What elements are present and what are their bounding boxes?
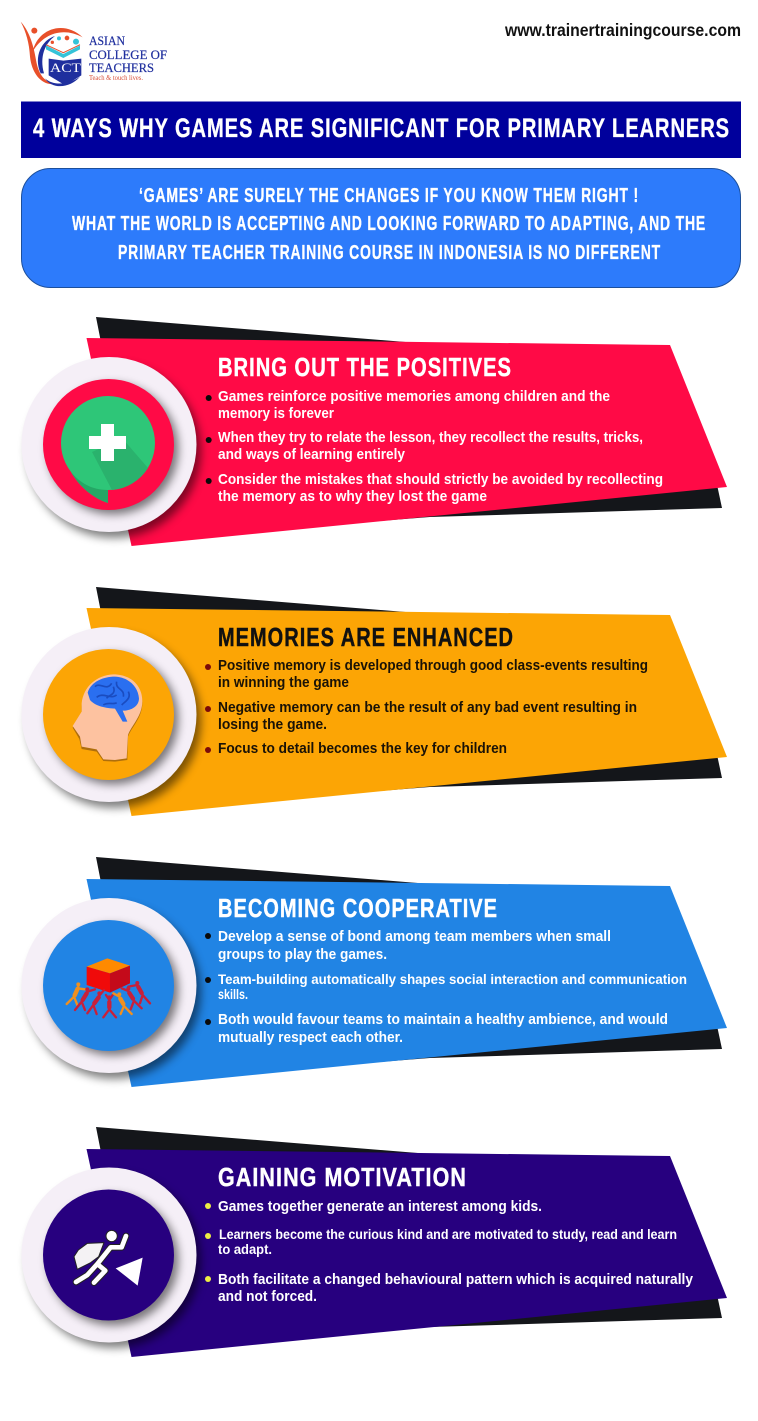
icon: caped runner and triangle <box>74 1230 143 1286</box>
logo: Asian College of Teachers: ACT <box>50 60 81 75</box>
bullet list: to adapt. <box>218 1242 272 1257</box>
bullet list: Focus to detail becomes the key for children <box>218 741 507 757</box>
heading: BRING OUT THE POSITIVES <box>218 352 512 382</box>
bullet list <box>205 929 687 1046</box>
panel: memories are enhanced <box>22 587 727 816</box>
panel: gaining motivation <box>22 1127 727 1357</box>
bullet list: Games together generate an interest among kids. <box>218 1199 542 1215</box>
title banner <box>21 102 741 158</box>
panel: becoming cooperative <box>22 857 727 1087</box>
bullet list: Learners become the curious kind and are motivated to study, read and learn <box>219 1227 677 1242</box>
panel: bring out the positives <box>22 317 727 546</box>
bullet list: mutually respect each other. <box>218 1030 403 1046</box>
bullet list: the memory as to why they lost the game <box>218 489 487 505</box>
bullet list: Games reinforce positive memories among children and the <box>218 389 610 405</box>
bullet list: losing the game. <box>218 717 327 733</box>
bullet list: and not forced. <box>218 1289 317 1305</box>
bullet list <box>205 658 648 757</box>
bullet list: Team-building automatically shapes social interaction and communication <box>218 971 687 987</box>
bullet list: Develop a sense of bond among team members when small <box>218 929 611 945</box>
bullet list: groups to play the games. <box>218 947 387 963</box>
bullet list: memory is forever <box>218 406 334 422</box>
bullet list <box>206 389 663 505</box>
logo: Asian College of Teachers <box>21 22 167 86</box>
bullet list: Both facilitate a changed behavioural pattern which is acquired naturally <box>218 1272 694 1288</box>
bullet list: and ways of learning entirely <box>218 447 406 463</box>
icon: green speech bubble with plus <box>61 396 155 503</box>
heading: GAINING MOTIVATION <box>218 1162 467 1192</box>
heading: MEMORIES ARE ENHANCED <box>218 622 514 652</box>
bullet list: Positive memory is developed through good class-events resulting <box>218 658 648 674</box>
icon: head with brain <box>73 674 142 762</box>
bullet list: skills. <box>218 986 248 1002</box>
bullet list <box>205 1199 694 1305</box>
bullet list: Consider the mistakes that should strictly be avoided by recollecting <box>218 472 663 488</box>
bullet list: When they try to relate the lesson, they recollect the results, tricks, <box>218 430 643 446</box>
logo: Asian College of Teachers: Teach & touch lives. <box>89 73 143 82</box>
bullet list: in winning the game <box>218 675 349 691</box>
bullet list: Negative memory can be the result of any bad event resulting in <box>218 700 637 716</box>
bullet list: Both would favour teams to maintain a healthy ambience, and would <box>218 1012 668 1028</box>
logo: Asian College of Teachers: COLLEGE OF <box>89 48 167 62</box>
logo: Asian College of Teachers: TEACHERS <box>89 61 154 75</box>
intro panel <box>22 168 740 288</box>
icon: team lifting a box <box>67 958 150 1017</box>
heading: BECOMING COOPERATIVE <box>218 893 498 923</box>
logo: Asian College of Teachers: ASIAN <box>89 34 125 48</box>
